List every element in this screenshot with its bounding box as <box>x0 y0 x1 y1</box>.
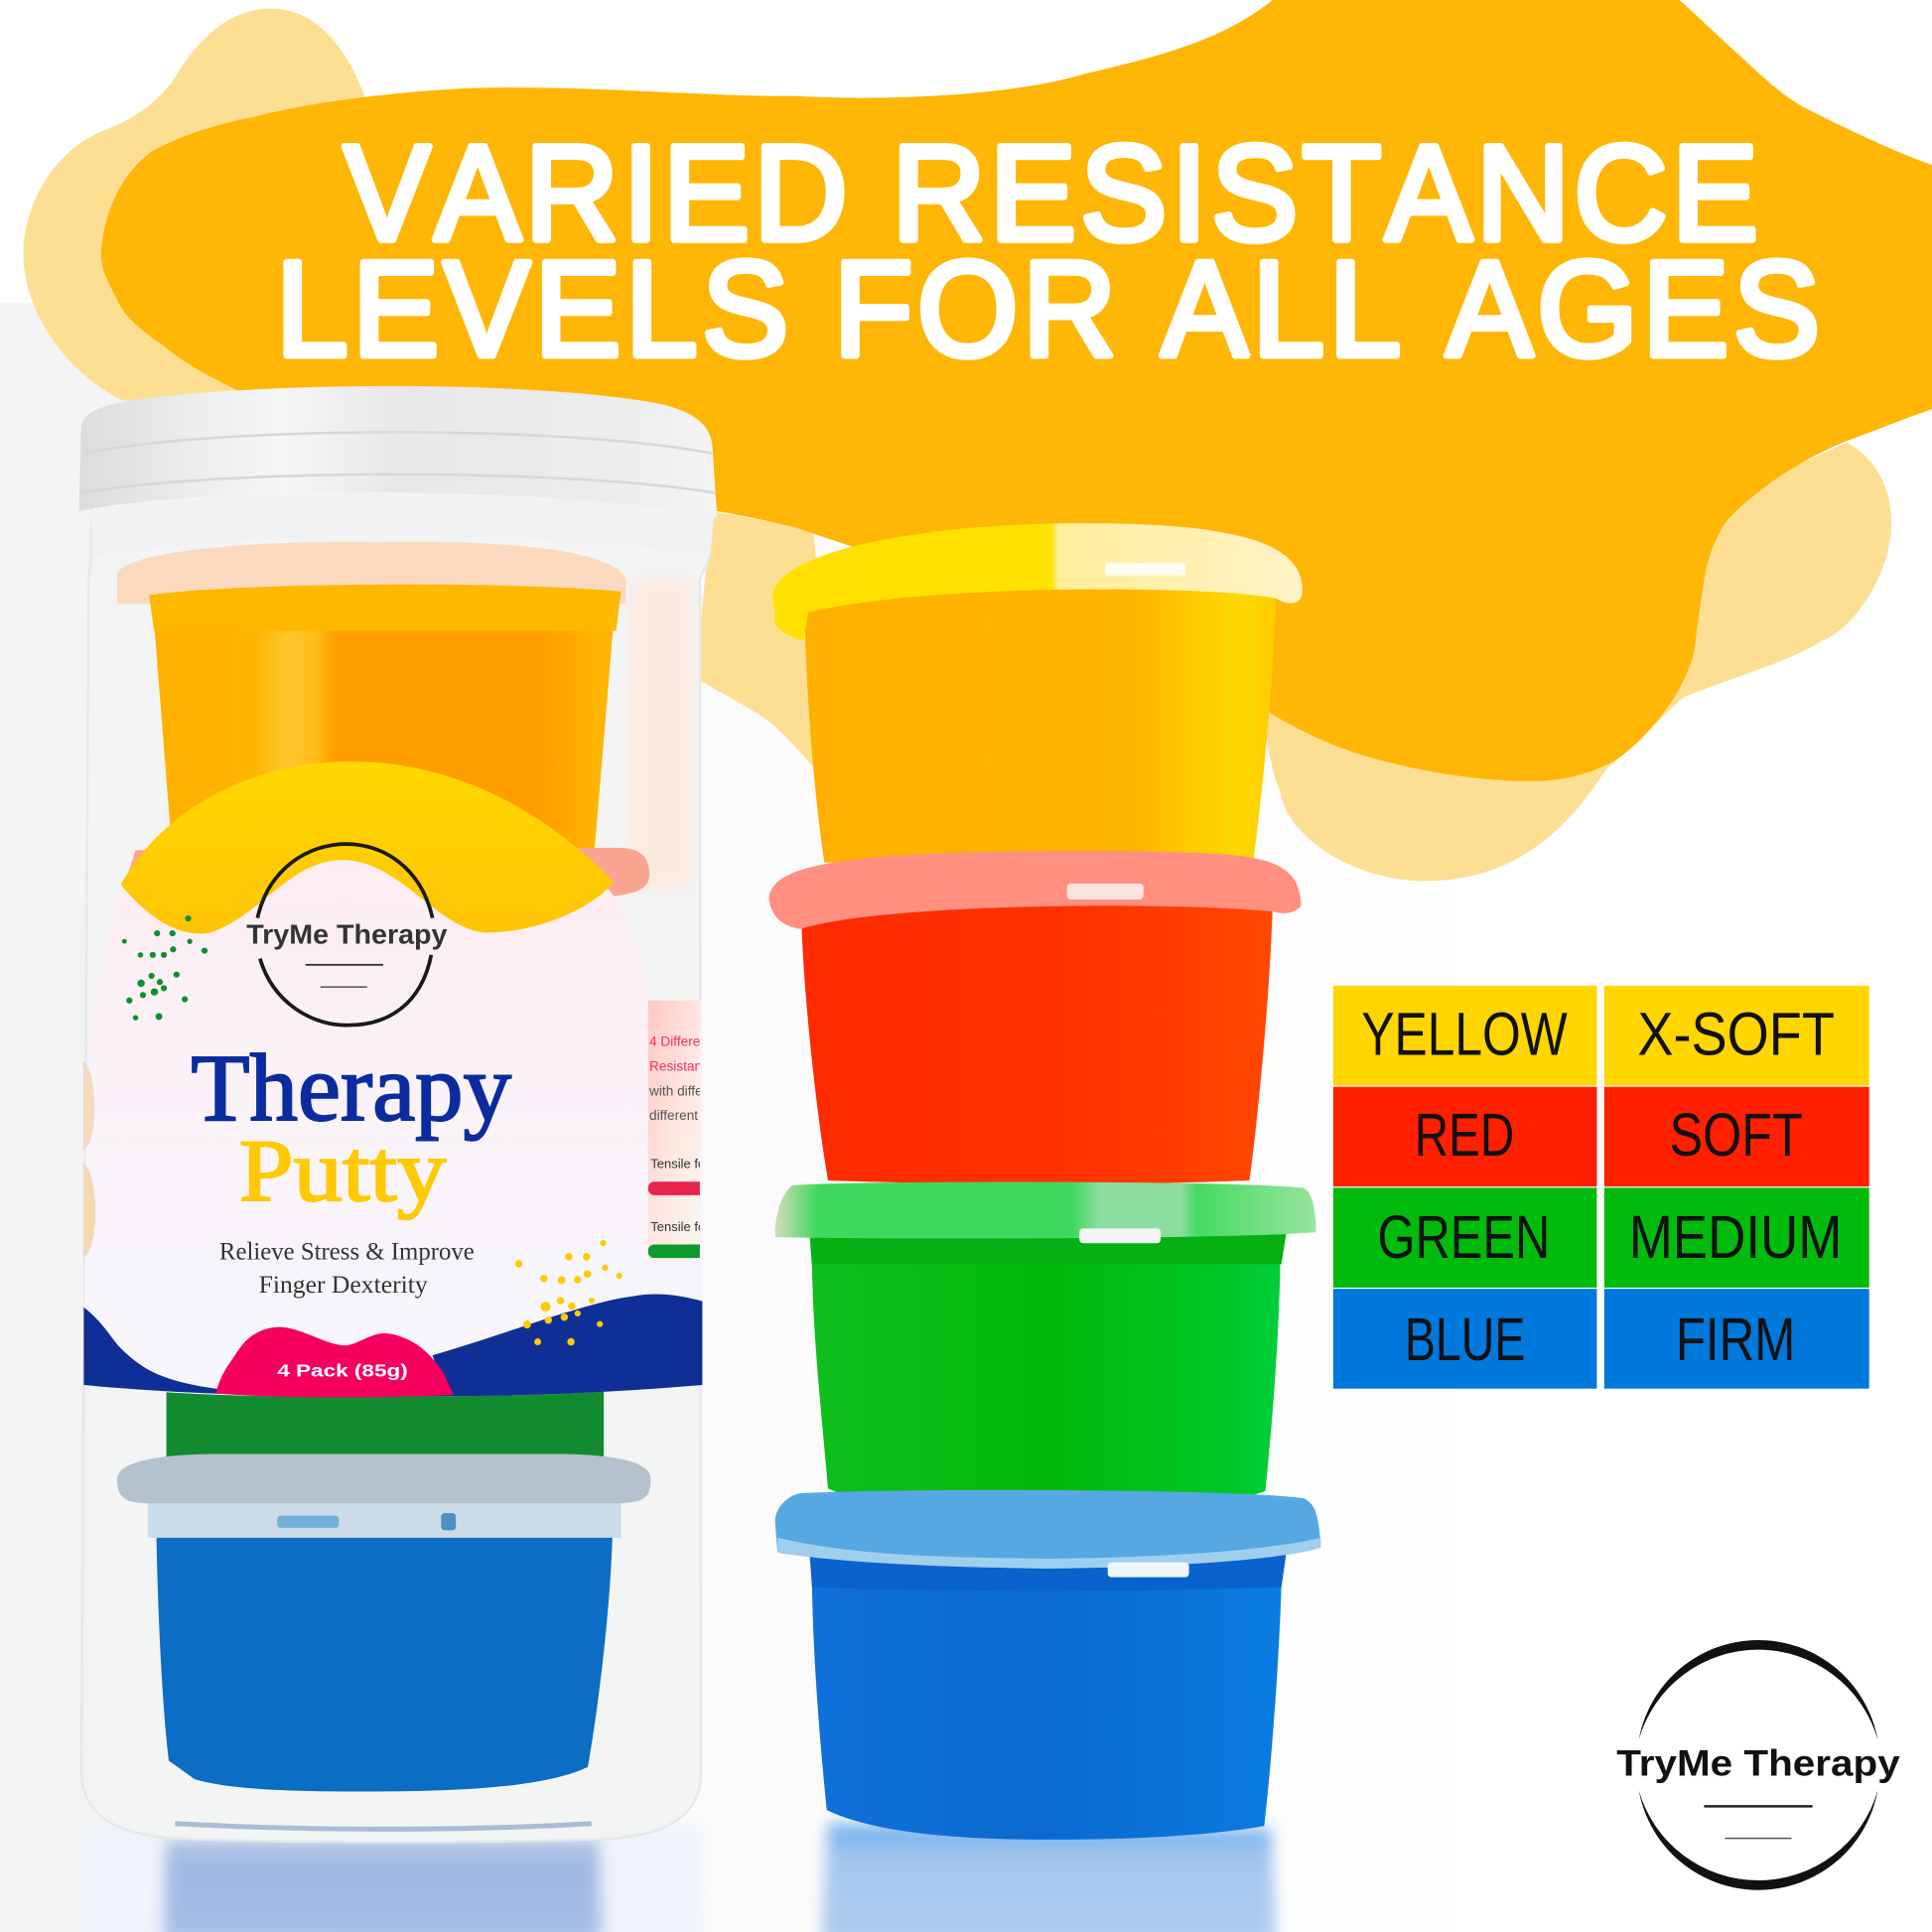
row red <box>1333 1087 1869 1186</box>
row green <box>1333 1187 1869 1288</box>
row green: GREEN <box>1378 1203 1550 1271</box>
jar lid <box>78 386 717 517</box>
blue tub <box>775 1490 1320 1840</box>
jar reflection <box>78 1824 705 1932</box>
inner blue tub <box>117 1453 650 1792</box>
title: VARIED RESISTANCE <box>344 118 1758 269</box>
label title putty: Putty <box>239 1122 447 1220</box>
title: LEVELS FOR ALL AGES <box>276 233 1820 385</box>
row yellow <box>1333 986 1869 1085</box>
jar product <box>78 386 759 1932</box>
label side panel: Resistance Levels <box>649 1058 759 1073</box>
label side panel: 4 Different <box>649 1035 712 1049</box>
jar neck <box>88 495 715 557</box>
row red: RED <box>1415 1101 1514 1169</box>
row yellow: YELLOW <box>1361 1000 1568 1067</box>
background panel <box>0 303 1453 1932</box>
label body <box>83 844 702 1397</box>
label logo <box>246 844 448 1026</box>
resistance table <box>1333 986 1869 1389</box>
green dots <box>122 915 207 1021</box>
label tagline: Relieve Stress & Improve <box>219 1238 475 1265</box>
red tub <box>768 851 1302 1184</box>
yellow tub <box>772 523 1303 863</box>
green tub <box>775 1181 1315 1508</box>
row red: SOFT <box>1670 1101 1803 1169</box>
label tagline: Finger Dexterity <box>259 1272 428 1299</box>
yellow dots <box>515 1240 622 1345</box>
row green: MEDIUM <box>1629 1203 1842 1271</box>
label left icons <box>83 1062 95 1257</box>
brand logo: TryMe Therapy <box>1616 1741 1900 1783</box>
inner red lid <box>121 848 649 897</box>
main orange blob <box>101 0 1932 781</box>
label logo: TryMe Therapy <box>246 919 448 950</box>
inner yellow tub <box>117 542 625 888</box>
blue tub reflection <box>821 1824 1277 1932</box>
label yellow hump <box>121 761 614 933</box>
row blue: FIRM <box>1676 1306 1795 1373</box>
label side panel: Tensile force 700 <box>650 1219 749 1234</box>
row yellow: X-SOFT <box>1637 1000 1835 1067</box>
label side panel: Tensile force 300 <box>650 1157 749 1172</box>
label pink pack badge <box>215 1327 454 1398</box>
label <box>83 761 759 1398</box>
jar right glass tint <box>630 579 692 888</box>
label tagline <box>219 1238 475 1299</box>
row blue: BLUE <box>1405 1306 1525 1373</box>
label side panel <box>647 1001 700 1259</box>
label title therapy: Therapy <box>191 1035 512 1141</box>
light yellow blob <box>24 9 1891 881</box>
inner green tub <box>167 1386 604 1460</box>
label side panel: with different <box>648 1083 726 1098</box>
jar body <box>81 490 712 1842</box>
jar base line <box>175 1821 592 1832</box>
label blue wave <box>83 1295 702 1396</box>
label side panel: different people <box>649 1108 743 1123</box>
brand logo <box>1616 1640 1900 1890</box>
row blue <box>1333 1289 1869 1389</box>
label pink pack badge: 4 Pack (85g) <box>277 1360 408 1380</box>
title <box>276 118 1820 385</box>
